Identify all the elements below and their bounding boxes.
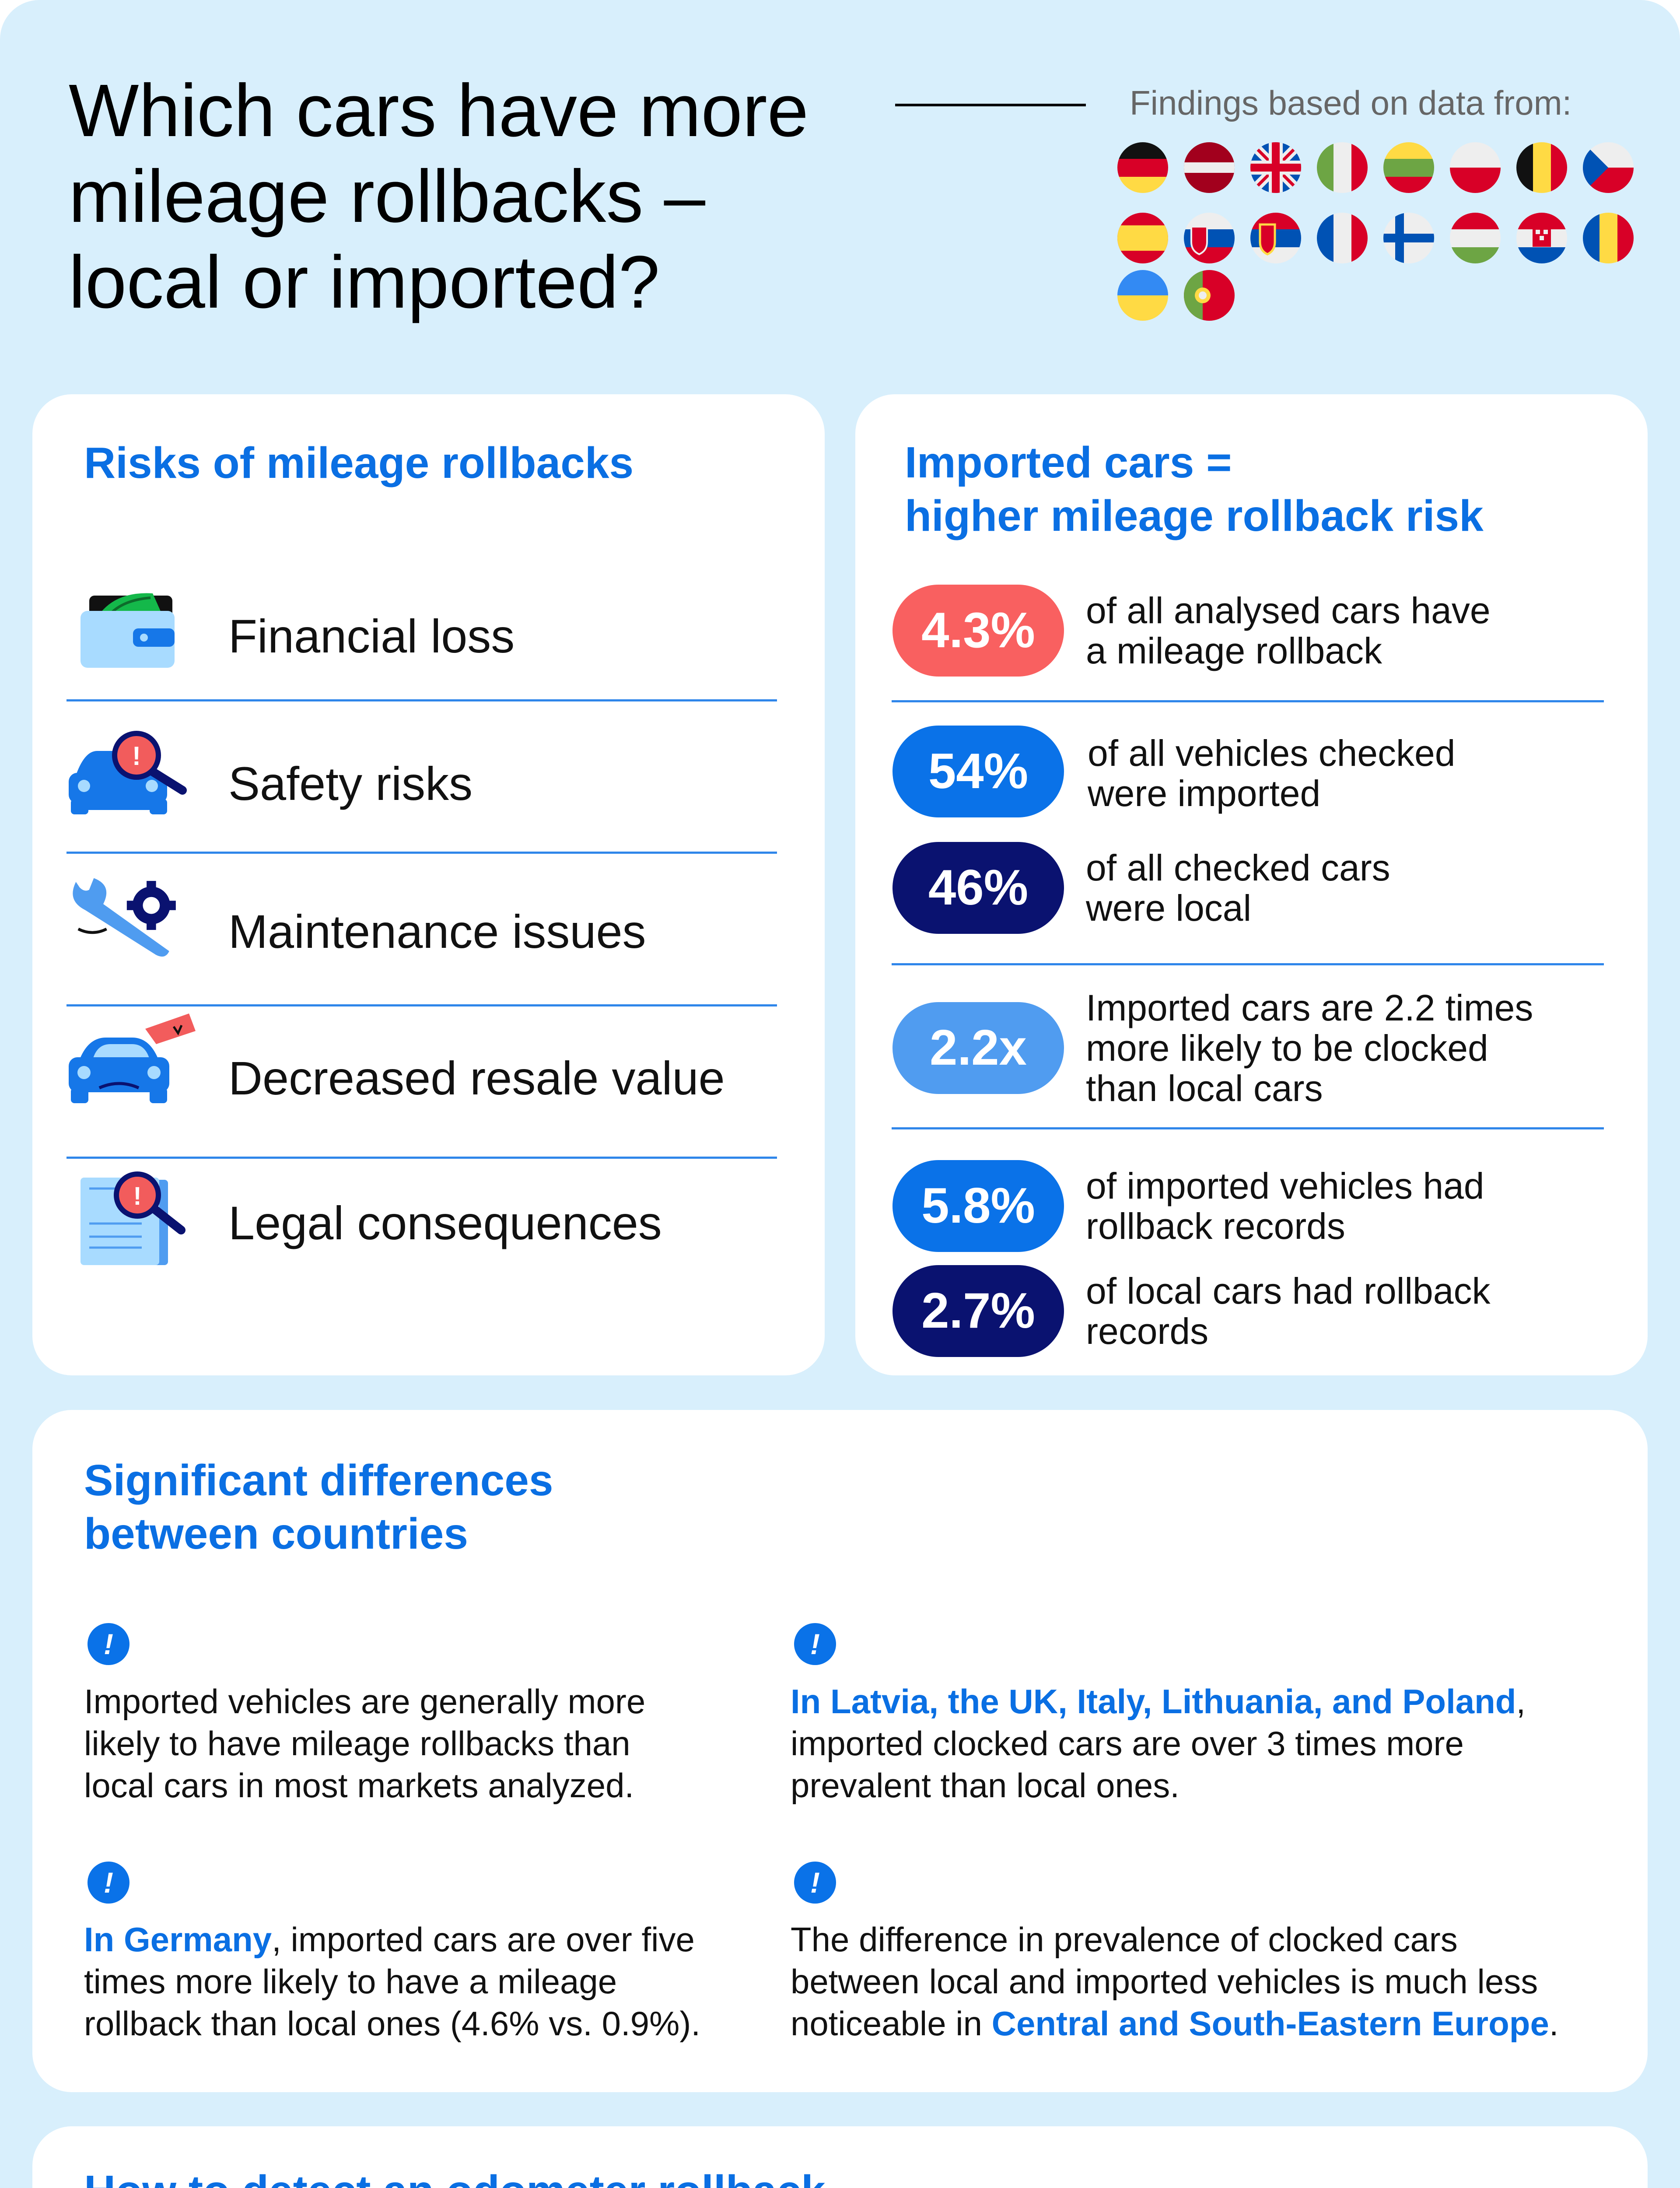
flag: Spain [1116,211,1169,265]
stat: 46%: of all checked cars [1086,847,1390,888]
flags group [1116,140,1654,324]
stat: 4.3%: of all analysed cars have [1086,590,1491,631]
icon: car with magnifier [66,729,193,817]
flag: Latvia [1183,141,1236,194]
flag: Portugal [1183,269,1236,322]
stat: 2.7%: of local cars had rollback [1086,1270,1490,1311]
text: decreased resale value: Decreased resale value [228,1052,725,1105]
stat: 5.8%: rollback records [1086,1206,1345,1247]
connector line [895,104,1086,106]
title [69,68,808,325]
text: legal consequences: Legal consequences [228,1196,662,1249]
note: Germany: In Germany, imported cars are over five [84,1920,695,1959]
flag: France [1316,211,1369,265]
note: Latvia UK Italy: imported clocked cars are over 3 times more [791,1724,1464,1763]
stat: 46% [892,842,1592,934]
flag: UK [1249,141,1302,194]
note: imported generally: Imported vehicles are generally more [84,1682,645,1721]
text: safety risks: Safety risks [228,757,472,810]
flag: Italy [1316,141,1369,194]
icon: document with magnifier: ! [133,1182,142,1210]
note: Latvia UK Italy: prevalent than local ones. [791,1766,1180,1805]
stat: 4.3%: 4.3% [921,603,1035,658]
stat: 54% [892,726,1592,817]
title: local or imported? [69,241,660,324]
stat: 46%: were local [1086,887,1251,929]
stat: 2.2x: more likely to be clocked [1086,1027,1488,1069]
flag: Croatia [1515,211,1568,265]
text: maintenance issues: Maintenance issues [228,905,646,958]
panel: how to detect [32,2126,1648,2188]
heading: imported cars: higher mileage rollback risk [905,491,1484,540]
title: mileage rollbacks – [69,155,705,238]
panel: risks of mileage rollbacks [32,394,825,1375]
icon: wallet [76,587,181,670]
stat: 54%: of all vehicles checked [1088,733,1455,774]
heading: imported cars: Imported cars = [905,438,1232,487]
findings label: Findings based on data from: [1130,84,1572,122]
stat: 4.3%: a mileage rollback [1086,630,1382,671]
heading: risks: Risks of mileage rollbacks [84,438,634,487]
flag: Romania [1582,211,1635,265]
title: Which cars have more [69,69,808,152]
note: central SE Europe: noticeable in Central and South-Eastern Europe. [791,2004,1559,2043]
stat: 2.2x [892,1002,1592,1094]
icon: car with price tag [66,1011,198,1108]
stat: 54%: 54% [928,743,1028,799]
stat: 4.3% [892,585,1592,677]
note: Latvia UK Italy [791,1623,1578,1807]
note: central SE Europe: ! [810,1866,820,1899]
note: Germany: rollback than local ones (4.6% vs. 0.9%). [84,2004,700,2043]
note: Germany [84,1862,740,2045]
stat: 2.2x: than local cars [1086,1068,1323,1109]
heading: imported cars [905,436,1484,543]
note: central SE Europe [791,1862,1578,2045]
panel: significant differences [32,1410,1648,2092]
stat: 2.7% [892,1265,1592,1357]
note: central SE Europe: The difference in prevalence of clocked cars [791,1920,1458,1959]
heading: significant differences: Significant differences [84,1456,553,1505]
heading: significant differences [84,1454,553,1560]
flag: Czechia [1582,141,1635,194]
flag: Germany [1116,141,1169,194]
note: imported generally [84,1623,740,1807]
stat: 2.2x: Imported cars are 2.2 times [1086,987,1533,1028]
flag: Hungary [1449,211,1502,265]
stat: 2.7%: 2.7% [921,1283,1035,1339]
note: central SE Europe: between local and imported vehicles is much less [791,1962,1538,2001]
note: Germany: ! [104,1866,113,1899]
stat: 54%: were imported [1088,773,1320,814]
flag: Belgium [1515,141,1568,194]
note: imported generally: local cars in most markets analyzed. [84,1766,634,1805]
flag: Slovakia [1183,211,1236,265]
note: Germany: times more likely to have a mileage [84,1962,617,2001]
stat: 2.2x: 2.2x [930,1020,1027,1076]
note: imported generally: ! [104,1628,113,1660]
icon: car with magnifier: ! [132,741,141,771]
flag: Finland [1382,211,1435,265]
panel: imported cars stats [855,394,1648,1375]
flag: Poland [1449,141,1502,194]
heading: significant differences: between countries [84,1509,468,1558]
note: imported generally: likely to have mileage rollbacks than [84,1724,630,1763]
flag: Serbia [1249,211,1302,265]
icon: document with magnifier [76,1171,190,1267]
icon: wrench and gear [66,869,189,965]
note: Latvia UK Italy: In Latvia, the UK, Italy, Lithuania, and Poland, [791,1682,1526,1721]
stat: 5.8%: 5.8% [921,1178,1035,1234]
stat: 46%: 46% [928,860,1028,915]
text: financial loss: Financial loss [228,610,514,663]
flag: Lithuania [1382,141,1435,194]
stat: 5.8% [892,1160,1592,1252]
stat: 2.7%: records [1086,1311,1208,1352]
note: Latvia UK Italy: ! [810,1628,820,1660]
stat: 5.8%: of imported vehicles had [1086,1165,1484,1206]
flag: Ukraine [1116,269,1169,322]
